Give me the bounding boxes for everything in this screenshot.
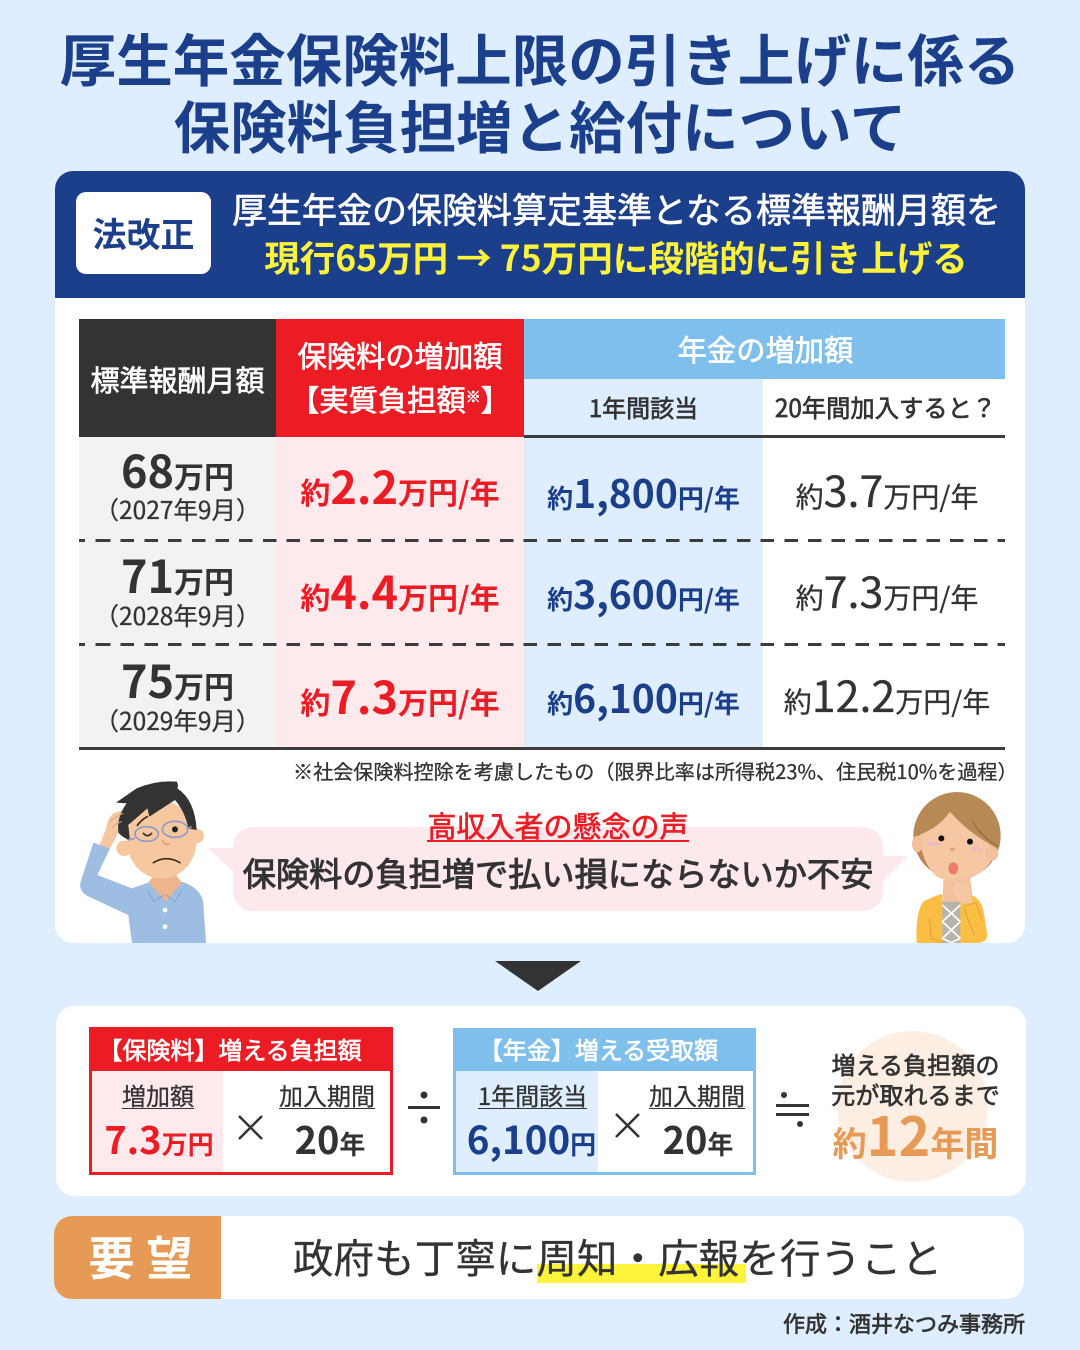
icon: approximately equal bbox=[776, 1092, 809, 1127]
header: one year bbox=[524, 379, 763, 437]
column backgrounds bbox=[79, 437, 276, 748]
request text: 政府も丁寧に周知・広報を行うこと bbox=[293, 1226, 942, 1285]
row 2028: 約4.4万円/年 bbox=[300, 557, 500, 622]
row 2027 bbox=[94, 436, 978, 527]
label: 加入期間 bbox=[649, 1077, 745, 1112]
header: pension increase bbox=[524, 319, 1007, 379]
result caption: 増える負担額の bbox=[832, 1046, 999, 1081]
icon: divide bbox=[408, 1092, 440, 1124]
label: 加入期間 bbox=[279, 1077, 375, 1112]
arrow: down bbox=[495, 961, 581, 991]
panel: law revision banner bbox=[55, 171, 1025, 298]
header: premium increase: 【実質負担額※】 bbox=[290, 378, 510, 420]
label: 1年間該当 bbox=[478, 1077, 587, 1112]
value: 20年 bbox=[295, 1110, 365, 1165]
highlight bbox=[537, 1264, 746, 1283]
header: premium increase: 保険料の増加額 bbox=[297, 334, 503, 376]
badge: law revision: 法改正 bbox=[92, 208, 194, 257]
row 2027: 約3.7万円/年 bbox=[796, 458, 978, 520]
row 2029: 約6,100円/年 bbox=[547, 669, 740, 725]
row 2029 bbox=[94, 646, 990, 738]
banner line 2: 現行65万円 → 75万円に段階的に引き上げる bbox=[264, 231, 968, 282]
box heading: 【保険料】増える負担額 bbox=[98, 1031, 362, 1066]
title bbox=[60, 16, 1020, 165]
row 2027: 68万円 bbox=[121, 436, 234, 501]
row 2027: （2027年9月） bbox=[94, 492, 260, 527]
request label: 要望 bbox=[88, 1223, 204, 1289]
header: premium increase bbox=[276, 319, 524, 437]
row 2029: （2029年9月） bbox=[94, 703, 260, 738]
box heading background bbox=[453, 1028, 756, 1071]
title: 保険料負担増と給付について bbox=[174, 83, 906, 165]
result caption bbox=[831, 1046, 1000, 1111]
row 2027: 約1,800円/年 bbox=[547, 464, 740, 520]
header: monthly standard bbox=[79, 319, 276, 437]
bubble heading: 高収入者の懸念の声 bbox=[427, 804, 688, 846]
row 2029: 約12.2万円/年 bbox=[784, 663, 990, 725]
header: pension increase: 年金の増加額 bbox=[678, 328, 853, 370]
speech bubble bbox=[208, 804, 908, 911]
times bbox=[615, 1113, 640, 1138]
bubble text: 保険料の負担増で払い損にならないか不安 bbox=[243, 847, 873, 896]
label: 増加額 bbox=[122, 1077, 194, 1112]
footnote: ※社会保険料控除を考慮したもの（限界比率は所得税23%、住民税10%を過程） bbox=[293, 756, 1018, 785]
panel: calculation bbox=[56, 1006, 1026, 1196]
result caption: 元が取れるまで bbox=[831, 1076, 1000, 1111]
row 2029: 75万円 bbox=[121, 646, 234, 711]
header: one year: 1年間該当 bbox=[589, 389, 698, 424]
table bbox=[79, 319, 1005, 750]
box heading: 【年金】増える受取額 bbox=[479, 1031, 718, 1066]
value: 20年 bbox=[663, 1110, 733, 1165]
box: pension received bbox=[453, 1028, 756, 1175]
row 2028: （2028年9月） bbox=[94, 598, 260, 633]
panel: main bbox=[55, 171, 1025, 943]
request label bbox=[54, 1216, 221, 1299]
row 2029: 約7.3万円/年 bbox=[300, 662, 500, 727]
banner line 1: 厚生年金の保険料算定基準となる標準報酬月額を bbox=[232, 183, 1001, 234]
box: premium burden bbox=[89, 1027, 393, 1175]
result value: 約12年間 bbox=[833, 1093, 998, 1172]
result: about twelve years bbox=[831, 1031, 1000, 1182]
credit: 作成：酒井なつみ事務所 bbox=[783, 1307, 1025, 1339]
icon: worried man bbox=[80, 781, 206, 943]
row 2028: 71万円 bbox=[121, 541, 234, 606]
header: twenty years: 20年間加入すると？ bbox=[775, 389, 996, 424]
box heading background bbox=[89, 1027, 393, 1071]
row 2028: 約3,600円/年 bbox=[547, 565, 740, 621]
panel: request bbox=[54, 1216, 1024, 1299]
header: monthly standard: 標準報酬月額 bbox=[90, 358, 264, 400]
icon: thinking woman bbox=[912, 792, 1001, 943]
times bbox=[238, 1115, 263, 1140]
title: 厚生年金保険料上限の引き上げに係る bbox=[60, 16, 1020, 98]
value: 7.3万円 bbox=[104, 1110, 214, 1165]
row 2028 bbox=[94, 541, 978, 633]
badge: law revision bbox=[76, 192, 211, 274]
value: 6,100円 bbox=[467, 1110, 596, 1166]
row 2027: 約2.2万円/年 bbox=[300, 452, 500, 517]
row 2028: 約7.3万円/年 bbox=[796, 559, 978, 621]
